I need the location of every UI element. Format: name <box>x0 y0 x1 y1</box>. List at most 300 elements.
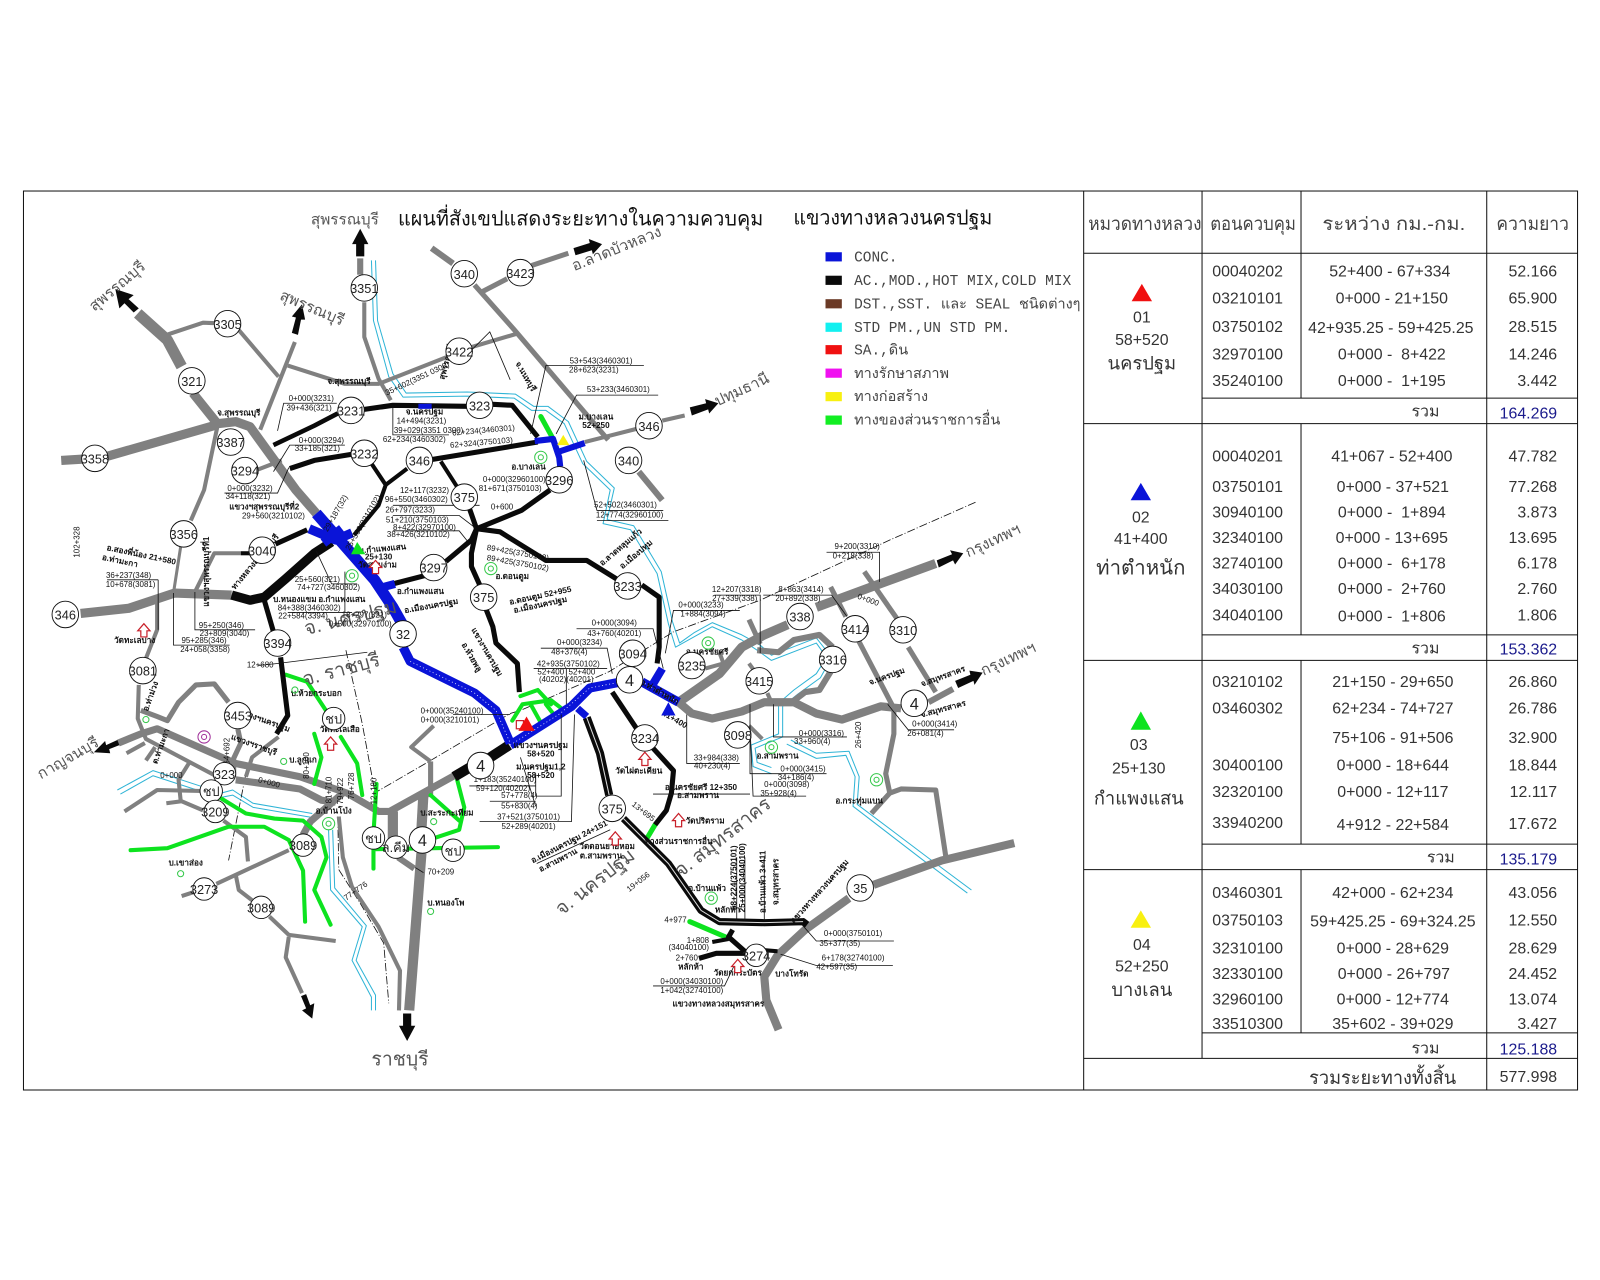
place labels: บ.สะระกะเทียม <box>420 808 474 818</box>
chainage labels: 35+377(35) <box>819 939 861 948</box>
section 01 nakhon pathom: รวม <box>1412 404 1439 421</box>
chainage labels: 62+234(3460302) <box>383 435 446 444</box>
route shields: 340 <box>618 454 639 469</box>
chainage labels: 0+000(3234) <box>557 638 603 647</box>
place labels: อ.เมืองนครปฐม <box>512 594 568 616</box>
place labels: 58+520 <box>527 771 555 780</box>
section 04 bang len: 35+602 - 39+029 <box>1332 1016 1454 1033</box>
section 01 nakhon pathom: 52+400 - 67+334 <box>1329 264 1451 281</box>
place labels: บ.ห้วยกระบอก <box>291 688 342 698</box>
place labels: บางโทรัด <box>775 969 808 979</box>
road centre lines <box>587 718 803 923</box>
place labels: อ.ดอนตูม 52+955 <box>508 585 573 608</box>
route shields: 35 <box>853 881 867 896</box>
route shields: 3089 <box>247 900 275 915</box>
place labels: ต.สามพราน <box>580 851 623 860</box>
route shields: 3233 <box>613 579 642 594</box>
distance table <box>1084 191 1578 1090</box>
place labels: สุพรรณบุรี <box>437 342 457 381</box>
place labels: อ.บ้านโป่ง <box>316 805 352 815</box>
section 02 tha tamnak: 77.268 <box>1508 479 1557 496</box>
destination labels: กรุงเทพฯ <box>963 521 1024 562</box>
place labels: บ.หนองโพ <box>427 897 464 907</box>
chainage labels: 26+420 <box>854 721 863 748</box>
section 04 bang len: 32310100 <box>1212 940 1283 957</box>
route shields: 3235 <box>678 659 706 674</box>
section 04 bang len: 12.550 <box>1508 913 1557 930</box>
route shields: ชป <box>203 784 220 799</box>
place labels: แขวงฯนครปฐม <box>514 741 568 751</box>
chainage labels: 37+521(3750101) <box>497 813 560 822</box>
section 02 tha tamnak: 03750101 <box>1212 479 1283 496</box>
table header: ตอนควบคุม <box>1210 213 1296 236</box>
chainage labels: 59+120(40202) <box>476 784 530 793</box>
chainage labels: 0+218(338) <box>833 551 874 560</box>
place labels: แขวงฯราชบุรี <box>229 731 279 758</box>
section 04 bang len: 43.056 <box>1508 885 1557 902</box>
chainage labels: 29+560(3210102) <box>242 512 305 521</box>
section 02 tha tamnak: 0+000 - 6+178 <box>1338 556 1446 573</box>
direction arrows <box>94 229 983 1041</box>
chainage labels: 0+000 <box>257 775 282 790</box>
place labels: แขวงฯนครปฐม <box>237 707 291 735</box>
table header: หมวดทางหลวง <box>1088 213 1202 234</box>
place labels: ต.ท่ามะกา <box>150 727 171 765</box>
section 02 tha tamnak: 2.760 <box>1517 581 1557 598</box>
chainage labels: 62+234(3460301) <box>452 423 516 438</box>
grand total <box>1309 1064 1557 1088</box>
section 04 bang len: 0+000 - 12+774 <box>1337 991 1449 1008</box>
place labels: 25+130 <box>365 552 393 561</box>
section 02 tha tamnak: 6.178 <box>1517 556 1557 573</box>
section 01 nakhon pathom: 52.166 <box>1508 264 1557 281</box>
chainage labels: 62+324(3750103) <box>450 435 513 450</box>
section 04 bang len: 03460301 <box>1212 885 1283 902</box>
section 02 tha tamnak: 41+067 - 52+400 <box>1331 448 1453 465</box>
route shields: 3234 <box>631 731 659 746</box>
black roads: asphalt concrete <box>232 404 807 958</box>
section 01 nakhon pathom: 14.246 <box>1508 346 1557 363</box>
place labels: อ.สองพี่น้อง 21+580 <box>106 541 178 567</box>
chainage labels: 29+187(32) <box>321 493 350 533</box>
place labels: บ.ลูกแก <box>289 755 317 765</box>
section 01 nakhon pathom: 3.442 <box>1517 373 1557 390</box>
chainage labels: 0+000(3232) <box>227 484 273 493</box>
route shields: 3296 <box>545 473 573 488</box>
place labels: แขวงทางหลวงนครปฐม <box>789 858 851 926</box>
section 02 tha tamnak: 153.362 <box>1500 641 1557 658</box>
chainage labels: 52+502(3460301) <box>594 500 657 509</box>
route shields: 3040 <box>248 543 276 558</box>
section 03 kamphaeng saen: 4+912 - 22+584 <box>1337 817 1449 834</box>
chainage labels: 53+233(3460301) <box>587 385 650 394</box>
section 02 tha tamnak <box>1096 448 1557 658</box>
place labels: 52+250 <box>582 421 610 430</box>
section 02 tha tamnak: รวม <box>1412 640 1439 657</box>
route shields: 3358 <box>81 451 109 466</box>
section 03 kamphaeng saen: 18.844 <box>1508 758 1557 775</box>
chainage labels: 24+058(3358) <box>180 645 230 654</box>
section 02 tha tamnak: 41+400 <box>1114 531 1168 548</box>
destination labels: สุพรรณบุรี <box>86 258 150 316</box>
province labels <box>34 212 1039 1072</box>
chainage labels: 8+863(3414) <box>778 585 824 594</box>
place labels: อ.ลาดหลุมแก้ว <box>597 526 645 568</box>
section 02 tha tamnak: 32740100 <box>1212 556 1283 573</box>
legend: DST.,SST. และ SEAL ชนิดต่างๆ <box>854 296 1080 313</box>
place labels: จ.สมุทรสาคร <box>772 858 782 905</box>
place labels: อ.กระทุ่มแบน <box>835 796 883 806</box>
section 01 nakhon pathom: 65.900 <box>1508 290 1557 307</box>
route shields: 3294 <box>231 464 259 479</box>
place labels: อ.เมืองนครปฐม 24+151 <box>529 818 610 866</box>
place labels: ทางหลวงสุพรรณบุรี <box>229 531 282 592</box>
chainage labels: 2+760 <box>676 953 698 962</box>
chainage labels: (40202)(40201) <box>539 675 594 684</box>
chainage labels: 0+000(3750101) <box>824 929 883 938</box>
place labels: อ.นครชัยศรี 12+350 <box>665 782 738 792</box>
province labels: จ. ราชบุรี <box>300 649 383 692</box>
chainage labels: 12+117(3232) <box>400 486 449 495</box>
map title: แผนที่สังเขปแสดงระยะทางในความควบคุม <box>398 205 763 232</box>
section 01 nakhon pathom: 35240100 <box>1212 373 1283 390</box>
section 03 kamphaeng saen: 75+106 - 91+506 <box>1332 730 1454 747</box>
route shields: 3098 <box>724 728 752 743</box>
chainage labels: 89+425(3750102) <box>486 553 550 573</box>
chainage labels: 0+600 <box>491 502 514 511</box>
section 01 nakhon pathom: 03750102 <box>1212 319 1283 336</box>
place labels: หลักห้า <box>678 962 703 972</box>
section 01 nakhon pathom <box>1108 264 1557 423</box>
chainage labels: 9+200(3310) <box>835 542 880 551</box>
section 03 kamphaeng saen: 0+000 - 12+117 <box>1337 784 1449 801</box>
chainage labels: 0+000(32960100) <box>483 475 546 484</box>
section 01 nakhon pathom: 164.269 <box>1500 406 1557 423</box>
section 03 kamphaeng saen: 21+150 - 29+650 <box>1332 674 1454 691</box>
highway district office markers <box>351 435 676 731</box>
table header <box>1088 213 1569 236</box>
place labels: อ.ห้วยพลู <box>459 640 484 674</box>
place labels: บ.หนองแขม <box>273 595 317 604</box>
section 02 tha tamnak: 34030100 <box>1212 581 1283 598</box>
section 03 kamphaeng saen: 32.900 <box>1508 730 1557 747</box>
place labels: วัดดอนยายหอม <box>579 842 635 851</box>
section 04 bang len: 0+000 - 26+797 <box>1338 966 1450 983</box>
route shields: 323 <box>469 398 490 413</box>
section 03 kamphaeng saen: 32320100 <box>1212 784 1283 801</box>
concrete road dotted centre lines <box>410 661 679 745</box>
place labels: บ.เขาส่อง <box>169 859 203 868</box>
section 03 kamphaeng saen: 26.860 <box>1508 674 1557 691</box>
route shields: 323 <box>214 767 235 782</box>
chainage labels: 81+671(3750103) <box>479 484 542 493</box>
chainage labels: 40+230(4) <box>694 762 731 771</box>
chainage labels: 1+884(3094) <box>680 610 726 619</box>
route shields: 3094 <box>618 646 647 661</box>
section 04 bang len: 125.188 <box>1500 1041 1557 1058</box>
route shields: 375 <box>454 490 475 505</box>
chainage labels: 95+285(346) <box>181 636 227 645</box>
route shields: 3394 <box>263 636 292 651</box>
place labels: อ.กำแพงแสน <box>397 586 444 596</box>
chainage labels: 36+237(348) <box>106 571 152 580</box>
grey roads: other pavement <box>61 248 1014 1030</box>
destination labels <box>34 212 1039 1072</box>
section 02 tha tamnak: 47.782 <box>1508 448 1557 465</box>
route shields: 346 <box>409 454 430 469</box>
chainage labels: 0+000(3294) <box>299 436 344 445</box>
place labels: อ.บ้านแพ้ว <box>688 883 726 893</box>
destination labels: ราชบุรี <box>371 1049 429 1072</box>
section 03 kamphaeng saen: 25+130 <box>1112 761 1166 778</box>
chainage labels: 0+500(32970100) <box>329 620 392 629</box>
chainage labels: 80+100 <box>302 752 311 779</box>
place labels: จ.สมุทรสาคร <box>920 698 968 720</box>
route shields: ล.คีม <box>382 840 410 855</box>
route shields: 4 <box>625 672 634 690</box>
legend: ทางของส่วนราชการอื่น <box>854 410 1000 430</box>
chainage labels: 0+000(3094) <box>592 619 637 628</box>
chainage labels: 26+081(4) <box>907 729 944 738</box>
place labels: อ.ท่าม่วง <box>141 680 160 712</box>
chainage labels: 0+000(3415) <box>780 765 826 774</box>
chainage labels: 8+422(32970100) <box>393 523 456 532</box>
chainage labels: 33+984(338) <box>694 753 739 762</box>
route shields: 340 <box>454 267 475 282</box>
outer frame <box>23 191 1578 1090</box>
place labels: อ.กำแพงแสน <box>318 594 366 604</box>
place labels: จ.นครปฐม <box>406 407 443 417</box>
section 04 bang len: 03750103 <box>1212 913 1283 930</box>
section 01 nakhon pathom: 01 <box>1133 310 1151 327</box>
chainage labels: 0+000(3414) <box>912 720 958 729</box>
section 02 tha tamnak: ท่าตำหนัก <box>1096 558 1185 580</box>
chainage labels: 20+892(338) <box>775 594 821 603</box>
section 04 bang len: 0+000 - 28+629 <box>1337 940 1449 957</box>
route shields: 4 <box>418 832 427 850</box>
chainage labels: 26+797(3233) <box>385 505 435 514</box>
section 04 bang len: บางเลน <box>1111 979 1173 1000</box>
chainage labels: 52+400 52+400 <box>537 668 596 677</box>
district title: แขวงทางหลวงนครปฐม <box>793 208 992 230</box>
route shields: 3453 <box>224 709 252 724</box>
section 01 nakhon pathom: 0+000 - 1+195 <box>1338 373 1446 390</box>
route shields: 3081 <box>129 664 157 679</box>
place labels: ม.บางเลน <box>579 413 614 422</box>
chainage labels: 12+180 <box>370 777 379 804</box>
section 04 bang len: 59+425.25 - 69+324.25 <box>1310 914 1476 931</box>
chainage labels: 1+808 <box>687 936 710 945</box>
place labels: 58+520 <box>527 749 555 758</box>
section 02 tha tamnak: 1.806 <box>1517 608 1557 625</box>
route shields: 3297 <box>419 561 448 576</box>
section 04 bang len: 32330100 <box>1212 966 1283 983</box>
chainage labels: 0+000(35240100) <box>421 706 484 715</box>
chainage labels: 0+000(3210101) <box>421 716 480 725</box>
route shields: 3273 <box>190 882 218 897</box>
chainage labels: 70+209 <box>427 868 455 877</box>
section 02 tha tamnak: 0+000 - 37+521 <box>1337 479 1449 496</box>
section 03 kamphaeng saen: 33940200 <box>1212 815 1283 832</box>
legend <box>826 250 1080 430</box>
section 01 nakhon pathom: 42+935.25 - 59+425.25 <box>1308 320 1474 337</box>
chainage labels: 42+935(3750102) <box>537 660 600 669</box>
chainage labels: 84+388(3460302) <box>278 603 341 612</box>
place labels: แขวงฯสุพรรณบุรีที่2 <box>229 500 300 512</box>
place labels: วัดไผ่ตะเคียน <box>615 766 663 776</box>
place labels: วัดปริตราม <box>686 817 725 826</box>
route shields: 32 <box>396 627 410 642</box>
chainage labels: 1+183(35240100) <box>474 775 537 784</box>
chainage labels: 0+000(3098) <box>764 780 810 789</box>
chainage labels: 25+560(3210102) <box>344 493 383 552</box>
place labels: 25+000(34040100) <box>738 843 747 912</box>
route shields: 4 <box>910 695 919 713</box>
chainage labels: 76+728 <box>347 772 356 799</box>
destination labels: สุพรรณบุรี <box>311 212 379 230</box>
place labels: จ.สุพรรณบุรี <box>217 408 261 419</box>
place labels: อ.ท่าตำหนัก <box>639 676 681 707</box>
place labels: อ.เมืองนครปฐม <box>403 596 459 616</box>
chainage labels: 53+543(3460301) <box>570 356 633 365</box>
chainage labels: 79+922 <box>336 777 345 804</box>
chainage labels: 52+289(40201) <box>502 822 556 831</box>
chainage labels: 33+960(4) <box>794 737 831 746</box>
chainage labels: 0+000(3231) <box>289 394 334 403</box>
place labels: วัดยกกระบัตร <box>714 969 762 978</box>
section 02 tha tamnak: 13.695 <box>1508 530 1557 547</box>
place labels: อ.สามพราน <box>757 751 799 760</box>
chainage labels: 0+000(3316) <box>799 729 844 738</box>
chainage labels: 10+678(3081) <box>106 580 156 589</box>
chainage labels: 14+494(3231) <box>397 417 447 426</box>
chainage labels: 96+550(3460302) <box>385 495 448 504</box>
destination labels: กรุงเทพฯ <box>978 639 1039 680</box>
legend: STD PM.,UN STD PM. <box>854 321 1010 337</box>
place labels: จ.นครปฐม <box>868 666 906 688</box>
grand total: 577.998 <box>1500 1069 1557 1086</box>
chainage labels: 77+776 <box>342 879 370 902</box>
section 02 tha tamnak: 02 <box>1132 510 1150 527</box>
district office symbols <box>143 451 883 914</box>
legend: ทางก่อสร้าง <box>854 388 928 406</box>
place labels: อ.นครชัยศรี <box>686 646 729 656</box>
section 03 kamphaeng saen: 12.117 <box>1510 784 1557 801</box>
rivers <box>117 260 971 1010</box>
route shields: 3422 <box>445 344 473 359</box>
section 04 bang len: 04 <box>1133 937 1151 954</box>
chainage labels: (34040100) <box>668 943 709 952</box>
chainage labels: 102+328 <box>73 526 82 558</box>
route shields: 3423 <box>506 266 535 281</box>
section 03 kamphaeng saen: รวม <box>1427 849 1455 866</box>
section 04 bang len: 28.629 <box>1508 940 1557 957</box>
section 02 tha tamnak: 0+000 - 1+806 <box>1338 609 1446 626</box>
section 03 kamphaeng saen: 03460302 <box>1212 700 1283 717</box>
section 01 nakhon pathom: 28.515 <box>1508 319 1557 336</box>
chainage labels: 81+710 <box>325 776 334 803</box>
route shields: 338 <box>789 610 811 625</box>
section 02 tha tamnak: 0+000 - 1+894 <box>1338 505 1446 522</box>
chainage labels: 55+830(4) <box>501 801 538 810</box>
section 04 bang len: 32960100 <box>1212 991 1283 1008</box>
chainage labels: 22+584(3394) <box>278 612 328 621</box>
route shields: 346 <box>55 608 76 623</box>
route shields: 4 <box>476 758 485 776</box>
place labels: วัดสามง่าม <box>358 561 397 570</box>
legend: ทางรักษาสภาพ <box>854 366 949 383</box>
place labels: แขวงฯสุพรรณบุรีที่1 <box>200 536 212 607</box>
route shields: 3387 <box>216 435 245 450</box>
section 02 tha tamnak: 00040201 <box>1212 448 1283 465</box>
green roads: other agencies <box>131 417 726 937</box>
destination labels: สุพรรณบุรี <box>277 287 347 330</box>
chainage labels: 57+778(4) <box>501 791 538 800</box>
chainage labels: 35+928(4) <box>760 789 797 798</box>
place labels: ม.กำแพงแสน <box>358 541 407 555</box>
destination labels: กาญจนบุรี <box>34 734 102 784</box>
chainage labels: 19+056 <box>625 870 652 894</box>
section 01 nakhon pathom: 58+520 <box>1115 332 1169 349</box>
route shields: 3310 <box>889 623 917 638</box>
grand total: รวมระยะทางทั้งสิ้น <box>1309 1064 1457 1088</box>
chainage labels: 0+000(3233) <box>678 600 724 609</box>
section 02 tha tamnak: 3.873 <box>1517 505 1557 522</box>
table header: ระหว่าง กม.-กม. <box>1322 213 1465 234</box>
section 04 bang len: 42+000 - 62+234 <box>1332 885 1454 902</box>
section 03 kamphaeng saen: 0+000 - 18+644 <box>1337 758 1449 775</box>
route shields: 3209 <box>201 805 229 820</box>
section 02 tha tamnak: 0+000 - 2+760 <box>1338 581 1446 598</box>
blue roads: concrete <box>309 406 679 745</box>
route shields: 3351 <box>350 281 378 296</box>
section 03 kamphaeng saen: 26.786 <box>1508 700 1557 717</box>
place labels: แขวงฯนครปฐม <box>468 626 504 678</box>
chainage labels: 89+425(3750103) <box>486 543 550 563</box>
legend: CONC. <box>854 250 898 266</box>
place labels: วัดทะเลเสือ <box>320 724 360 734</box>
chainage labels: 13+695 <box>630 800 657 824</box>
route shields: 375 <box>473 590 494 605</box>
chainage labels <box>73 356 958 995</box>
route shields: 375 <box>602 801 623 816</box>
section 04 bang len: 24.452 <box>1508 966 1557 983</box>
section 03 kamphaeng saen: 62+234 - 74+727 <box>1332 700 1454 717</box>
chainage labels: 38+426(3210102) <box>387 530 450 539</box>
table grid <box>1084 191 1578 1090</box>
place labels: จ.สุพรรณบุรี <box>327 376 371 387</box>
chainage labels: 42+597(35) <box>816 963 858 972</box>
section 01 nakhon pathom: 00040202 <box>1212 264 1283 281</box>
route shields: 3414 <box>841 622 869 637</box>
route shields: 321 <box>181 374 202 389</box>
chainage labels: 6+178(32740100) <box>822 953 885 962</box>
section 03 kamphaeng saen: 17.672 <box>1508 816 1557 833</box>
place labels: หลักห้า <box>715 904 740 914</box>
section 01 nakhon pathom: 0+000 - 8+422 <box>1338 346 1446 363</box>
chainage labels: 95+250(346) <box>199 621 244 630</box>
place labels: ม.นครปฐม1,2 <box>516 763 566 773</box>
section 03 kamphaeng saen: 03210102 <box>1212 674 1283 691</box>
province labels: จ. สมุทรสาคร <box>670 793 776 882</box>
chainage labels: 1+042(32740100) <box>660 986 724 995</box>
route shields: ชป <box>325 712 342 727</box>
place labels: อ.สามพราน <box>537 846 579 874</box>
place labels: อ.บ้านแพ้ว 3+411 <box>757 850 767 913</box>
route shields: 3089 <box>289 838 317 853</box>
province labels: จ. นครปฐม <box>302 596 399 640</box>
chainage labels: 27+339(338) <box>712 594 758 603</box>
